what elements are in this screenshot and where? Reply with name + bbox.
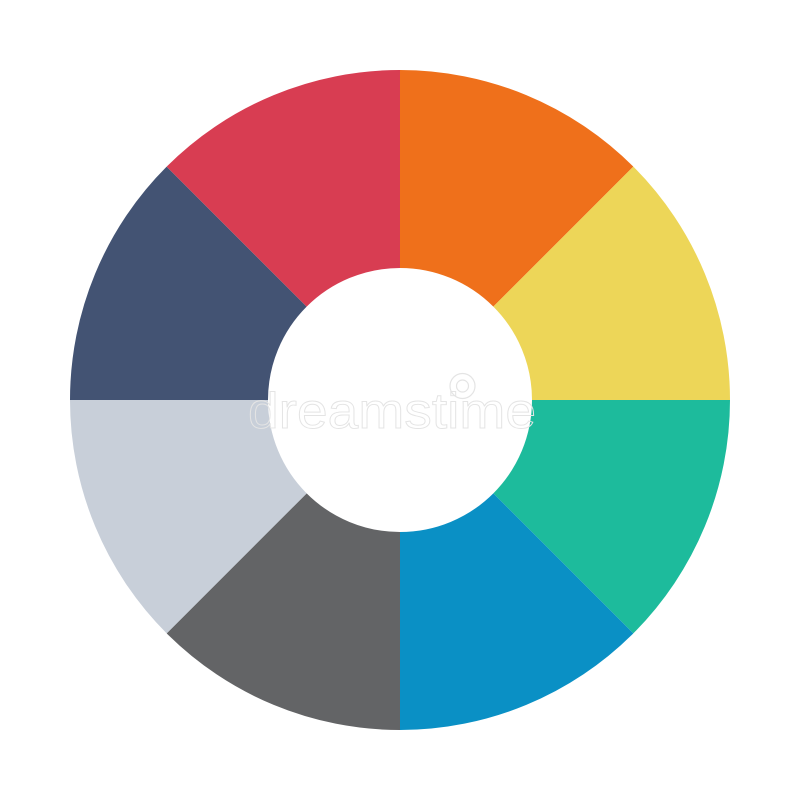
watermark logo xyxy=(450,374,475,398)
watermark xyxy=(248,374,536,439)
segment: teal xyxy=(493,400,730,633)
segment: red xyxy=(167,70,400,307)
segment: yellow xyxy=(493,167,730,400)
segment: blue xyxy=(400,493,633,730)
segment: dark grey xyxy=(167,493,400,730)
segment: navy xyxy=(70,167,307,400)
segment: orange xyxy=(400,70,633,307)
segment: light grey xyxy=(70,400,307,633)
watermark text: dreamstime xyxy=(248,383,536,439)
